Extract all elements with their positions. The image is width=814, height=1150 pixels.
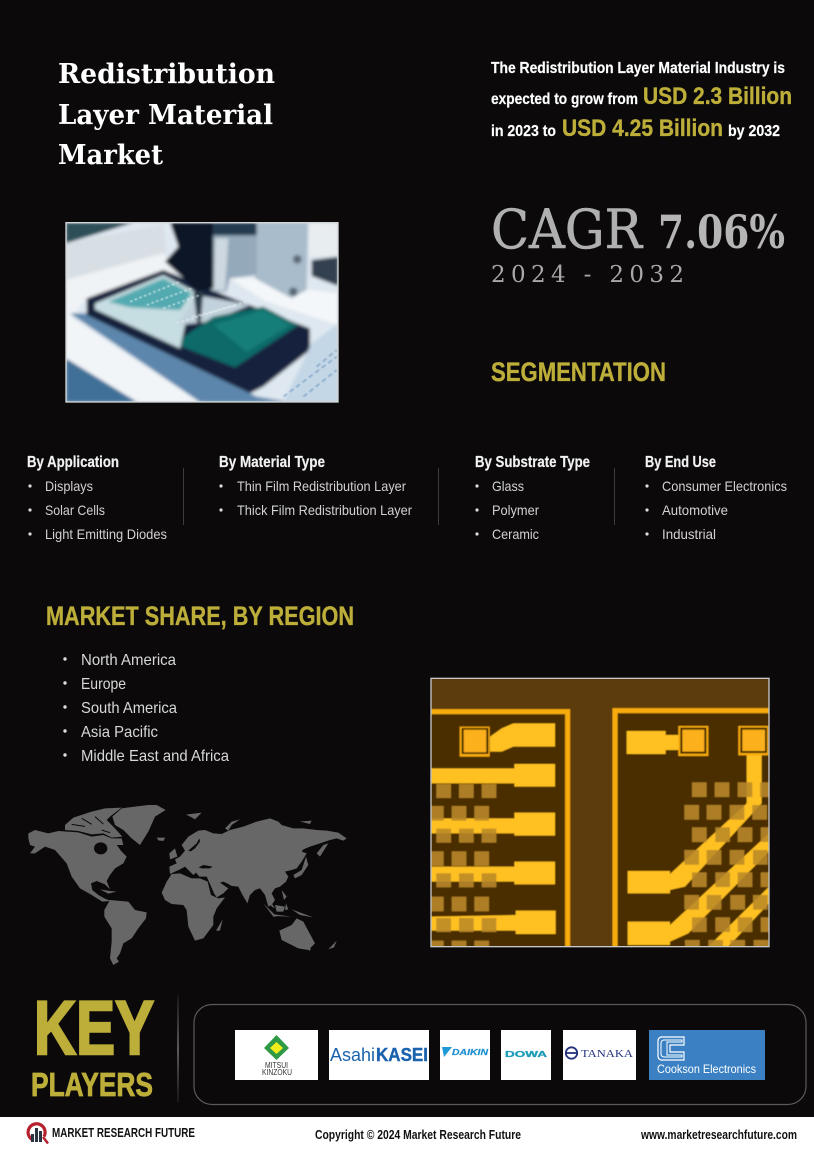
region list: Europe xyxy=(81,676,126,693)
footer: Copyright © 2024 Market Research Future xyxy=(315,1128,521,1142)
market growth statement: The Redistribution Layer Material Industry is xyxy=(491,60,785,77)
key players panel xyxy=(194,1004,806,1104)
CAGR figure: 7.06% xyxy=(658,205,785,259)
market growth statement: expected to grow from xyxy=(491,91,638,108)
region list: Asia Pacific xyxy=(81,724,158,741)
region list: Middle East and Africa xyxy=(81,748,229,765)
segment: by application: Light Emitting Diodes xyxy=(45,526,167,542)
segment: by substrate type: By Substrate Type xyxy=(475,454,590,471)
logo: Mitsui Kinzoku: KINZOKU xyxy=(262,1068,292,1077)
key players heading xyxy=(31,986,154,1103)
logo: Dowa xyxy=(501,1030,551,1080)
segment: by substrate type: Polymer xyxy=(492,502,539,518)
CAGR figure xyxy=(491,198,785,288)
CAGR figure: CAGR xyxy=(491,198,643,261)
logo: Mitsui Kinzoku xyxy=(235,1030,318,1080)
region list xyxy=(63,652,229,765)
CAGR figure: 2024 - 2032 xyxy=(491,262,684,288)
photo: gold redistribution layer circuit xyxy=(431,678,769,947)
segment: by application xyxy=(27,454,167,542)
segment: by end use: Industrial xyxy=(662,526,716,542)
segment: by material type: Thick Film Redistribution Layer xyxy=(237,502,412,518)
segment: by end use: Consumer Electronics xyxy=(662,478,787,494)
segment: by end use: Automotive xyxy=(662,502,728,518)
market growth statement: USD 2.3 Billion xyxy=(643,83,792,110)
segment: by application: Solar Cells xyxy=(45,502,105,518)
logo: Asahi Kasei: Asahi xyxy=(330,1045,375,1065)
title xyxy=(58,58,275,171)
logo: Daikin xyxy=(440,1030,490,1080)
logo: Daikin: DAIKIN xyxy=(452,1047,489,1057)
segment: by application: Displays xyxy=(45,478,93,494)
market growth statement xyxy=(491,60,792,142)
heading: segmentation: SEGMENTATION xyxy=(491,357,666,387)
logo: Cookson Electronics: Cookson Electronics xyxy=(657,1062,756,1076)
title: Market xyxy=(58,139,163,171)
segment: by material type: By Material Type xyxy=(219,454,325,471)
key players heading: KEY xyxy=(34,986,154,1071)
logo: Asahi Kasei xyxy=(329,1030,429,1080)
footer logo icon xyxy=(28,1124,48,1144)
title: Layer Material xyxy=(58,99,273,131)
key players heading: PLAYERS xyxy=(31,1066,153,1103)
segment: by substrate type: Ceramic xyxy=(492,526,539,542)
logo: Mitsui Kinzoku: MITSUI xyxy=(265,1061,288,1070)
segment: by end use: By End Use xyxy=(645,454,716,471)
photo: dispensing machine on circuit panel xyxy=(66,223,338,402)
world map xyxy=(28,805,347,965)
segment: by substrate type xyxy=(475,454,590,542)
segment: by material type xyxy=(219,454,412,518)
heading: market share by region: MARKET SHARE, BY REGION xyxy=(46,601,354,631)
logo: Cookson Electronics xyxy=(649,1030,765,1080)
logo: Tanaka: TANAKA xyxy=(581,1048,633,1060)
market growth statement: by 2032 xyxy=(728,123,780,140)
segment: by end use xyxy=(645,454,787,542)
footer xyxy=(0,1117,814,1150)
segment: by application: By Application xyxy=(27,454,119,471)
region list: South America xyxy=(81,700,177,717)
logo: Tanaka xyxy=(563,1030,636,1080)
region list: North America xyxy=(81,652,176,669)
title: Redistribution xyxy=(58,58,275,90)
market growth statement: USD 4.25 Billion xyxy=(562,115,723,142)
logo: Asahi Kasei: KASEI xyxy=(376,1045,428,1065)
footer: MARKET RESEARCH FUTURE xyxy=(52,1126,195,1140)
market growth statement: in 2023 to xyxy=(491,123,556,140)
segment: by substrate type: Glass xyxy=(492,478,524,494)
segment: by material type: Thin Film Redistribution Layer xyxy=(237,478,406,494)
logo: Dowa: DOWA xyxy=(505,1049,547,1059)
